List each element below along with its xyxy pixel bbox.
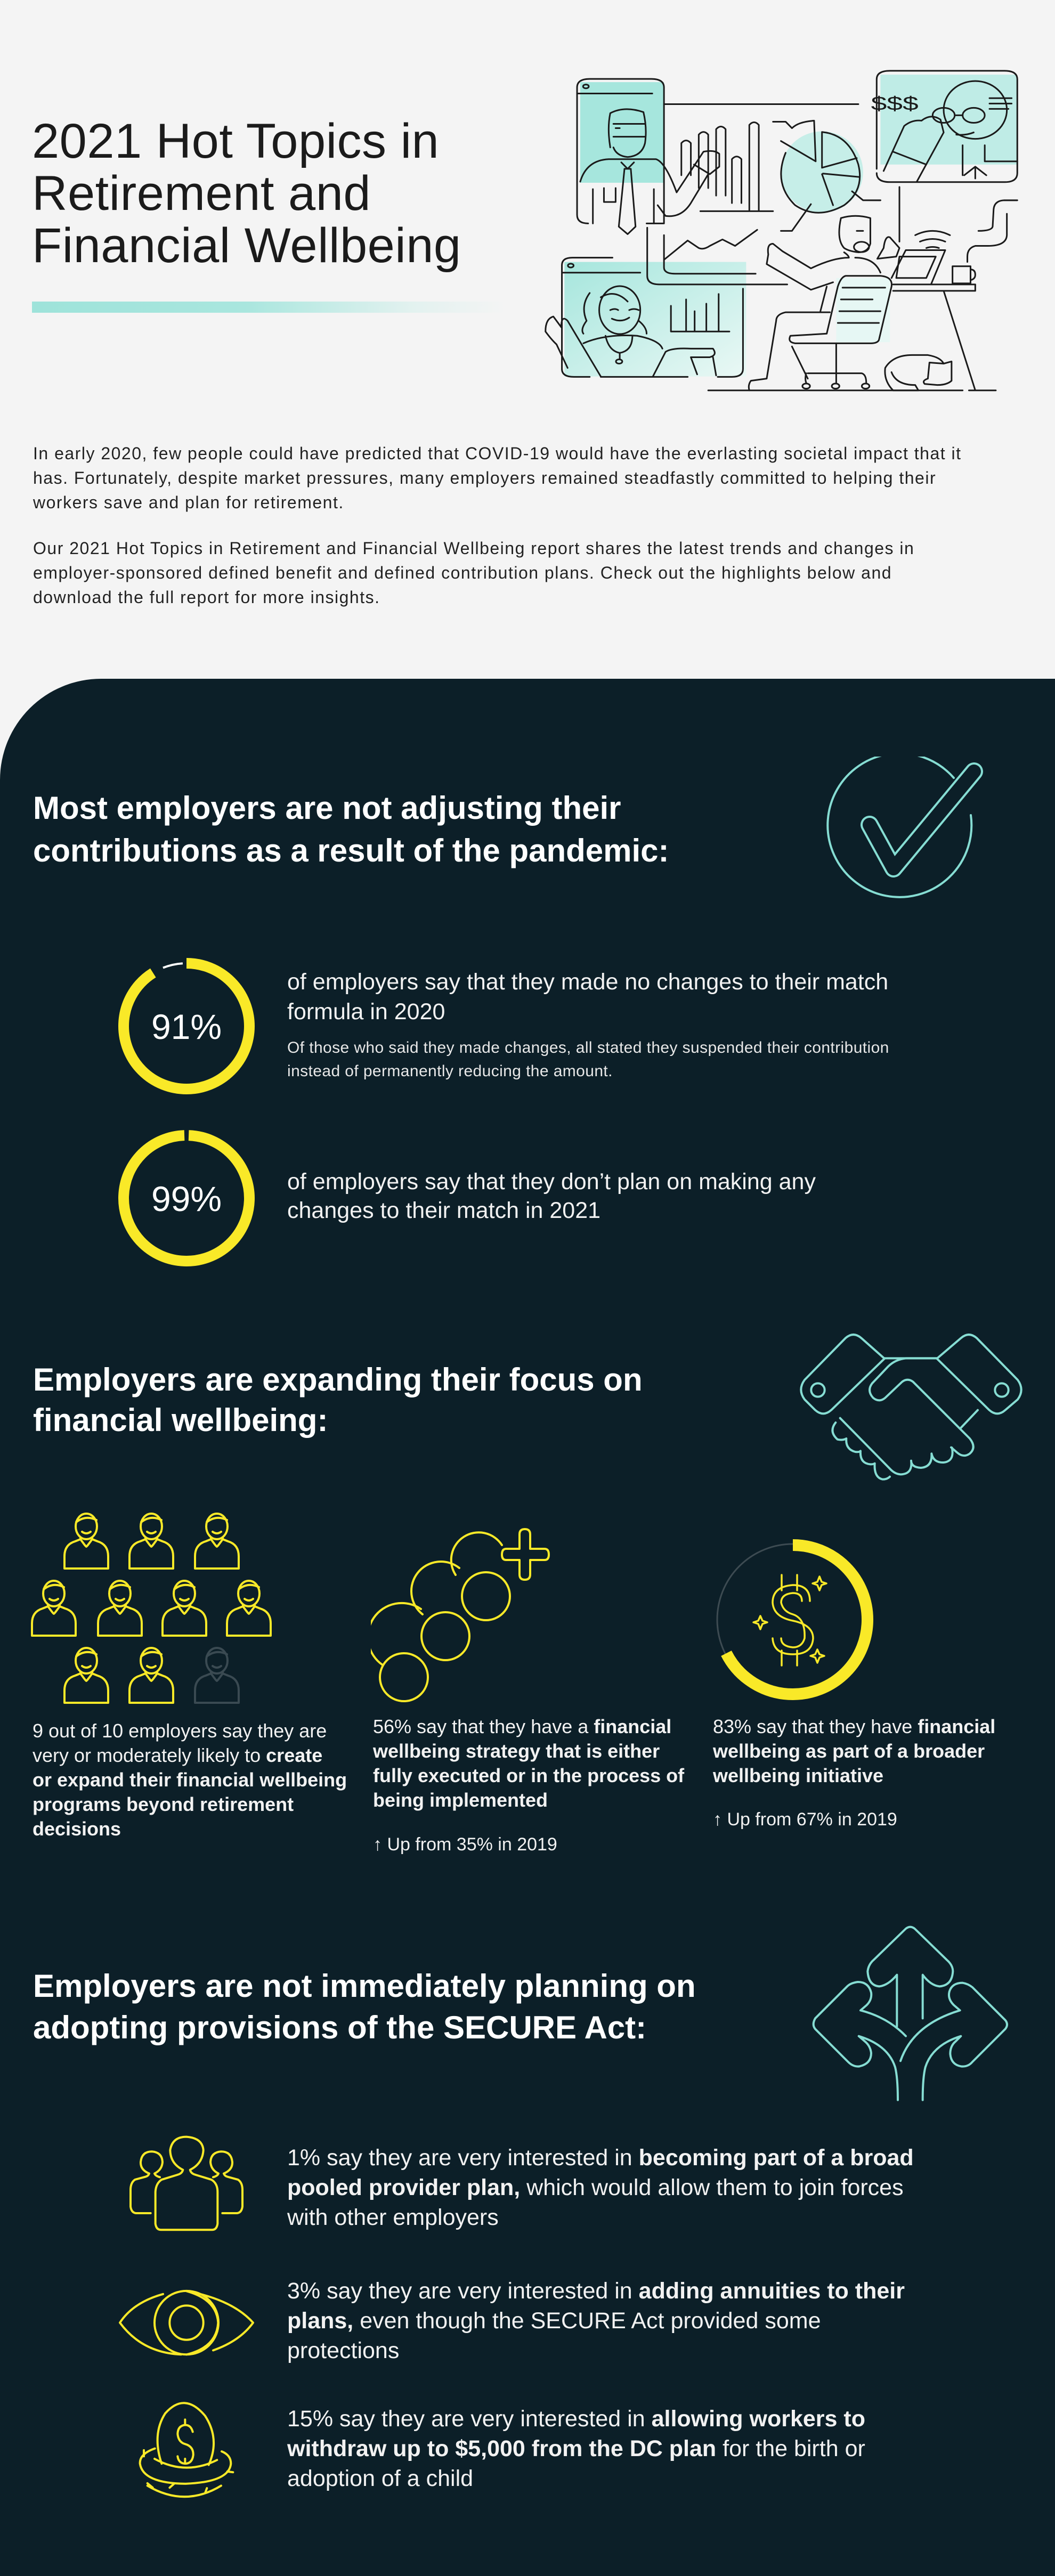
icon: diverging arrows <box>812 1925 1008 2101</box>
stat: 99% donut: 99% <box>151 1179 222 1218</box>
item 1: pooled provider plan <box>129 2135 914 2231</box>
text: 56% strategy: wellbeing strategy that is either <box>373 1740 660 1762</box>
text: 1% pooled plan: with other employers <box>287 2205 499 2230</box>
stat text 99%: changes to their match in 2021 <box>287 1198 600 1223</box>
stat: 91% donut <box>118 958 255 1094</box>
text: 15% withdraw: withdraw up to $5,000 from the DC plan for the birth or <box>287 2436 865 2461</box>
dark content panel <box>0 679 1055 2576</box>
intro paragraph 1: In early 2020, few people could have predicted that COVID-19 would have the everlasting societal impact that it <box>33 444 962 463</box>
intro paragraph 2: download the full report for more insights. <box>33 588 380 607</box>
stat: 99% donut <box>118 1130 255 1266</box>
text: 56% strategy: 56% say that they have a financial <box>373 1716 671 1737</box>
heading: SECURE Act <box>33 1968 696 2045</box>
text: 83% initiative: 83% say that they have financial <box>713 1716 995 1737</box>
icon: 9 of 10 people grid <box>31 1513 272 1704</box>
icon: checkmark circle <box>826 757 983 898</box>
icon: group of people <box>129 2135 244 2231</box>
stat footnote 91%: instead of permanently reducing the amount. <box>287 1062 613 1080</box>
stat text 91% <box>287 969 888 1025</box>
text: 1% pooled plan <box>287 2145 914 2230</box>
heading: financial wellbeing: Employers are expanding their focus on <box>33 1362 643 1397</box>
item 2: annuities <box>119 2278 905 2363</box>
text: 83% initiative <box>713 1716 995 1786</box>
text: 15% withdraw <box>287 2406 865 2491</box>
text: 3% annuities: protections <box>287 2338 399 2363</box>
intro paragraph 2: employer-sponsored defined benefit and defined contribution plans. Check out the highlights below and <box>33 563 892 582</box>
icon: eye <box>119 2290 254 2356</box>
intro paragraph 1 <box>33 444 962 512</box>
stat text 91%: of employers say that they made no changes to their match <box>287 969 888 995</box>
title: Financial Wellbeing <box>32 218 461 273</box>
text: 83% initiative: wellbeing as part of a broader <box>713 1740 985 1762</box>
intro paragraph 1: workers save and plan for retirement. <box>33 493 344 512</box>
stat footnote 91% <box>287 1039 889 1080</box>
icon: coins growing <box>371 1528 550 1702</box>
text: 15% withdraw: adoption of a child <box>287 2466 473 2491</box>
text: 15% withdraw: 15% say they are very interested in allowing workers to <box>287 2406 865 2432</box>
text: 1% pooled plan: pooled provider plan, which would allow them to join forces <box>287 2175 904 2200</box>
text: 3% annuities: 3% say they are very interested in adding annuities to their <box>287 2278 905 2304</box>
title underline gradient bar <box>32 302 506 313</box>
text: 3% annuities: plans, even though the SECURE Act provided some <box>287 2308 821 2334</box>
item 3: birth or adoption withdrawals <box>139 2402 865 2498</box>
text: up from 67%: ↑ Up from 67% in 2019 <box>713 1809 897 1830</box>
text: 9 out of 10: very or moderately likely to create <box>33 1744 322 1766</box>
heading: SECURE Act: adopting provisions of the SECURE Act: <box>33 2010 646 2045</box>
stat: 91% donut: 91% <box>151 1007 222 1046</box>
heading: financial wellbeing: financial wellbeing: <box>33 1402 328 1438</box>
text: 9 out of 10: 9 out of 10 employers say they are <box>33 1720 327 1742</box>
intro paragraph 2: Our 2021 Hot Topics in Retirement and Financial Wellbeing report shares the latest trends and changes in <box>33 539 914 558</box>
text: 83% initiative: wellbeing initiative <box>713 1765 883 1786</box>
text: 56% strategy: being implemented <box>373 1789 548 1811</box>
stat footnote 91%: Of those who said they made changes, all stated they suspended their contribution <box>287 1039 889 1057</box>
text: 1% pooled plan: 1% say they are very interested in becoming part of a broad <box>287 2145 914 2171</box>
icon: nest egg with dollar <box>139 2402 234 2498</box>
heading: SECURE Act: Employers are not immediately planning on <box>33 1968 696 2004</box>
text: 3% annuities <box>287 2278 905 2363</box>
text: 9 out of 10 <box>33 1720 347 1840</box>
title <box>32 114 461 273</box>
icon: handshake <box>800 1333 1022 1481</box>
heading: financial wellbeing <box>33 1362 643 1438</box>
intro paragraph 2 <box>33 539 914 607</box>
heading: contributions: Most employers are not adjusting their <box>33 790 621 826</box>
text: 9 out of 10: decisions <box>33 1818 121 1840</box>
icon: 83% dollar donut <box>716 1539 873 1700</box>
heading: contributions <box>33 790 669 868</box>
heading: contributions: contributions as a result of the pandemic: <box>33 833 669 868</box>
stat text 91%: formula in 2020 <box>287 999 445 1025</box>
text: 9 out of 10: or expand their financial wellbeing <box>33 1769 347 1791</box>
title: Retirement and <box>32 166 371 221</box>
title: 2021 Hot Topics in <box>32 114 439 168</box>
text: 56% strategy <box>373 1716 684 1811</box>
text: 9 out of 10: programs beyond retirement <box>33 1793 294 1815</box>
illustration: remote workers on video calls: $$$ <box>871 93 919 114</box>
stat text 99%: of employers say that they don’t plan on making any <box>287 1169 816 1194</box>
stat text 99% <box>287 1169 816 1223</box>
text: up from 35%: ↑ Up from 35% in 2019 <box>373 1834 557 1855</box>
illustration: remote workers on video calls <box>545 70 1018 391</box>
intro paragraph 1: has. Fortunately, despite market pressures, many employers remained steadfastly committed to helping their <box>33 468 936 487</box>
text: 56% strategy: fully executed or in the process of <box>373 1765 684 1786</box>
